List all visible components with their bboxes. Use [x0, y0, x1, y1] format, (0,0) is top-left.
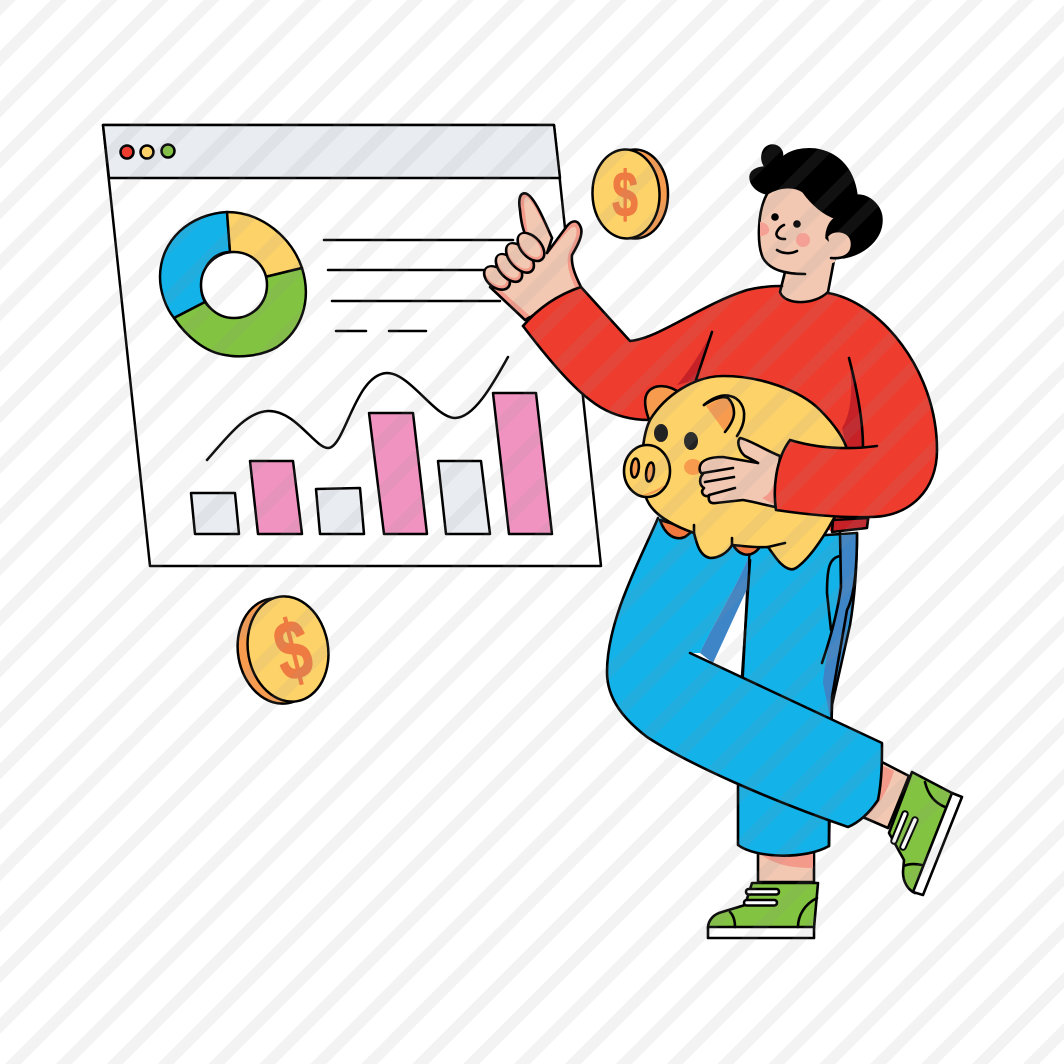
piggy bank: [624, 376, 848, 569]
sleeve cuff: [523, 287, 630, 400]
pig feet: [660, 520, 760, 555]
icon: top dollar coin: [591, 148, 668, 240]
pig snout: [624, 445, 670, 497]
neck and head: [750, 145, 882, 302]
pig right ear: [704, 395, 744, 436]
raised hand: [480, 193, 782, 420]
pig cheek: [684, 459, 702, 475]
character: person holding piggy bank: [480, 145, 962, 938]
curled fingers: [480, 228, 549, 294]
cheeks: [760, 222, 810, 247]
icon: bottom dollar coin: $: [265, 600, 321, 700]
window title bar: [103, 125, 560, 178]
bar chart: [191, 393, 552, 534]
face features: [771, 213, 801, 253]
panel: browser window: [103, 125, 601, 566]
line chart curve: [207, 357, 508, 460]
ear: [828, 231, 852, 258]
raised lower leg and shoe: [858, 760, 962, 895]
sweater torso and raised arm: [523, 286, 937, 532]
icon: bottom dollar coin: [229, 590, 337, 710]
trousers: bent leg: [607, 518, 882, 827]
pig eyes: [654, 424, 668, 442]
pig body: [642, 376, 848, 569]
hair: [750, 145, 882, 258]
lower leg and standing shoe: [708, 850, 818, 938]
icon: top dollar coin: $: [612, 159, 638, 230]
trousers: standing leg: [738, 533, 857, 856]
sweater forearm: [775, 293, 937, 517]
window control dots: [120, 144, 174, 158]
pig left ear: [645, 386, 680, 422]
donut chart: [160, 212, 306, 356]
holding hand: [700, 438, 780, 507]
text placeholder lines: [324, 240, 513, 331]
